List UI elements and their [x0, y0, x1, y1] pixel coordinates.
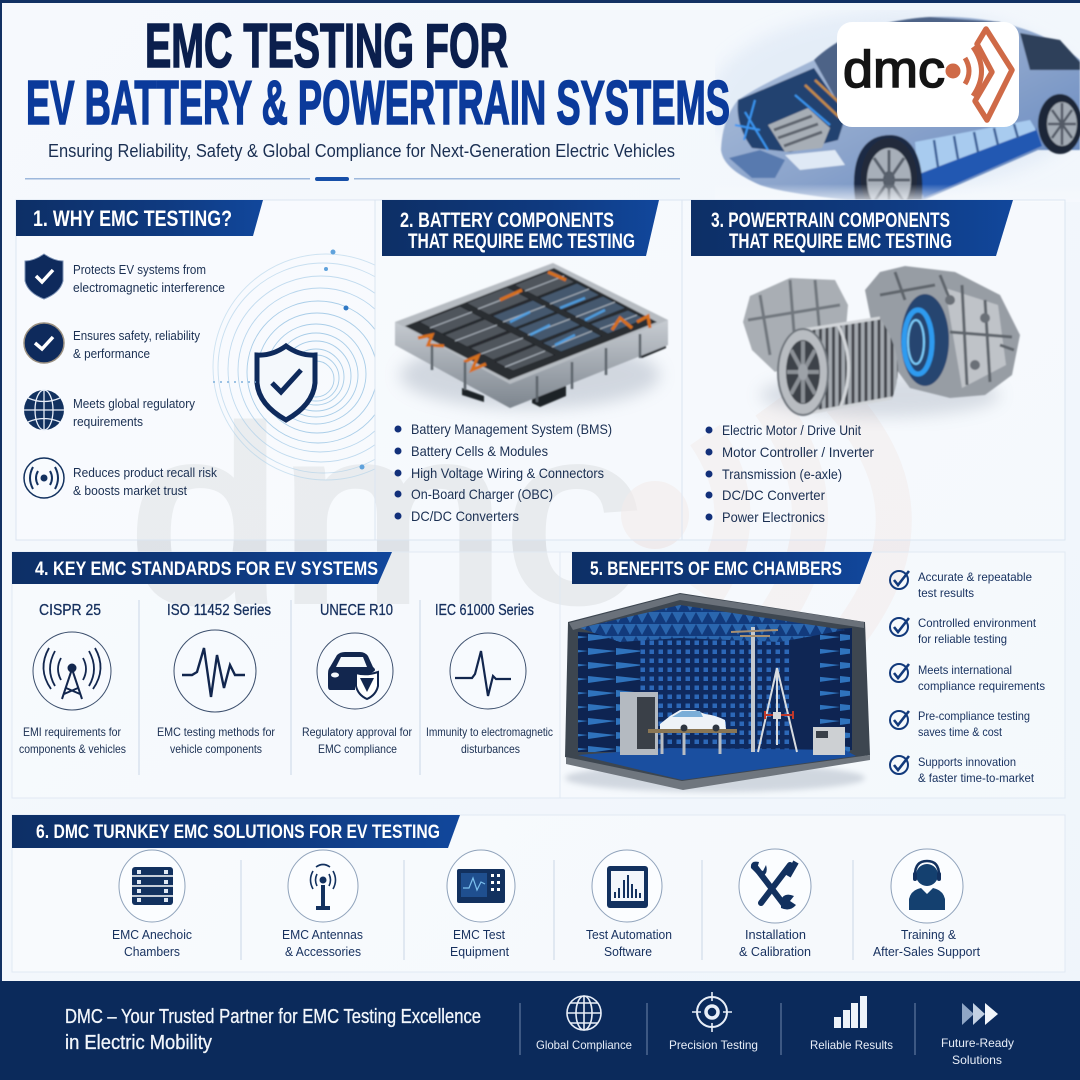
- panel: battery components: [375, 200, 682, 540]
- subtitle: Ensuring Reliability, Safety & Global Compliance for Next-Generation Electric Vehicles: [48, 141, 675, 161]
- left stator: [743, 278, 848, 372]
- item: recall: & boosts market trust: [73, 483, 187, 498]
- benefit checklist: Meets international: [918, 663, 1012, 677]
- solution: antennas: EMC Antennas: [282, 927, 363, 942]
- powertrain list: Electric Motor / Drive Unit: [722, 422, 861, 438]
- icon: precision testing: Precision Testing: [669, 1038, 758, 1052]
- solution: training: Training &: [901, 927, 956, 942]
- benefit checklist: [890, 570, 1045, 785]
- solution: chambers: EMC Anechoic: [112, 927, 192, 942]
- section header 2: [382, 200, 659, 256]
- powertrain list: [706, 422, 874, 525]
- battery list: Battery Cells & Modules: [411, 443, 548, 459]
- watermark: dmc logo: [130, 378, 894, 652]
- standard: ISO 11452: vehicle components: [170, 742, 262, 756]
- section header 4: 4. KEY EMC STANDARDS FOR EV SYSTEMS: [35, 559, 378, 580]
- solution: antennas: & Accessories: [285, 944, 361, 959]
- solution: equipment: [447, 850, 515, 959]
- solution: installation: & Calibration: [739, 944, 811, 959]
- item: safety: [24, 323, 200, 363]
- item: protects: [25, 254, 225, 299]
- car: [660, 710, 726, 729]
- standard: IEC 61000: IEC 61000 Series: [435, 602, 534, 619]
- standard: UNECE R10: Regulatory approval for: [302, 725, 412, 739]
- panel: standards: [12, 552, 560, 798]
- icon: future-ready: Future-Ready: [941, 1036, 1014, 1050]
- battery list: [394, 421, 612, 524]
- solution: chambers: Chambers: [124, 944, 180, 959]
- item: protects: electromagnetic interference: [73, 280, 225, 295]
- section header 3: [691, 200, 1013, 256]
- powertrain list: Power Electronics: [722, 509, 825, 525]
- standard: ISO 11452: ISO 11452 Series: [167, 602, 271, 619]
- benefit checklist: for reliable testing: [918, 632, 1007, 646]
- panel: powertrain components: [682, 200, 1065, 540]
- benefit checklist: Pre-compliance testing: [918, 709, 1030, 723]
- solution: software: Software: [604, 944, 652, 959]
- powertrain list: DC/DC Converter: [722, 487, 825, 503]
- right housing: [865, 266, 1020, 398]
- rack: [620, 692, 658, 755]
- panel: benefits of chambers: [560, 552, 1065, 798]
- solution: software: [586, 850, 672, 959]
- standard: IEC 61000: [426, 602, 553, 756]
- footer tagline: [65, 1006, 481, 1054]
- icon: future-ready: Solutions: [952, 1053, 1002, 1067]
- item: global: [24, 390, 195, 430]
- icon: global compliance: Global Compliance: [536, 1038, 632, 1052]
- icon: reliable results: Reliable Results: [810, 1038, 893, 1052]
- section header 3: THAT REQUIRE EMC TESTING: [729, 230, 952, 253]
- battery list: High Voltage Wiring & Connectors: [411, 465, 604, 481]
- title divider: [25, 177, 680, 181]
- benefit checklist: test results: [918, 586, 974, 600]
- battery pack illustration: [395, 263, 668, 409]
- standard: ISO 11452: EMC testing methods for: [157, 725, 275, 739]
- solution: installation: Installation: [745, 927, 806, 942]
- icon: reliable results: [810, 996, 893, 1052]
- standard: CISPR 25: components & vehicles: [19, 742, 126, 756]
- side equipment: [813, 727, 845, 755]
- car illustration: [715, 12, 1080, 200]
- standard: UNECE R10: EMC compliance: [318, 742, 397, 756]
- standard: IEC 61000: disturbances: [461, 742, 520, 756]
- logo: dmc: dmc: [843, 41, 945, 99]
- panel: turnkey solutions: [12, 815, 1065, 972]
- footer tagline: in Electric Mobility: [65, 1032, 212, 1054]
- benefit checklist: saves time & cost: [918, 725, 1003, 739]
- icon: precision testing: [669, 992, 758, 1052]
- standard: CISPR 25: EMI requirements for: [23, 725, 121, 739]
- logo: dmc: [837, 22, 1019, 127]
- section header 3: 3. POWERTRAIN COMPONENTS: [711, 209, 950, 232]
- benefit checklist: compliance requirements: [918, 679, 1045, 693]
- battery list: Battery Management System (BMS): [411, 421, 612, 437]
- section header 6: [12, 815, 460, 848]
- solution: equipment: EMC Test: [453, 927, 505, 942]
- benefit checklist: Supports innovation: [918, 755, 1016, 769]
- battery list: DC/DC Converters: [411, 508, 519, 524]
- item: recall: Reduces product recall risk: [73, 465, 217, 480]
- item: global: Meets global regulatory: [73, 396, 195, 411]
- mast: [751, 627, 755, 752]
- powertrain list: Motor Controller / Inverter: [722, 444, 874, 460]
- watermark: dmc logo: dmc: [130, 378, 640, 652]
- section header 1: 1. WHY EMC TESTING?: [33, 206, 232, 231]
- benefit checklist: Controlled environment: [918, 616, 1037, 630]
- solution: chambers: [112, 850, 192, 959]
- item: safety: Ensures safety, reliability: [73, 328, 200, 343]
- icon: global compliance: [536, 996, 632, 1052]
- section header 1: [16, 200, 263, 236]
- benefit checklist: Accurate & repeatable: [918, 570, 1032, 584]
- solution: installation: [739, 849, 811, 959]
- section header 4: [12, 552, 392, 584]
- tripod antenna: [758, 668, 797, 752]
- battery list: On-Board Charger (OBC): [411, 486, 553, 502]
- solution: software: Test Automation: [586, 927, 672, 942]
- item: protects: Protects EV systems from: [73, 262, 206, 277]
- standard: IEC 61000: Immunity to electromagnetic: [426, 725, 553, 739]
- section header 2: THAT REQUIRE EMC TESTING: [408, 230, 635, 253]
- footer tagline: DMC – Your Trusted Partner for EMC Testing Excellence: [65, 1006, 481, 1028]
- solution: equipment: Equipment: [450, 944, 509, 959]
- solution: training: After-Sales Support: [873, 944, 980, 959]
- standard: UNECE R10: UNECE R10: [320, 602, 393, 619]
- title: EMC TESTING FOR: [145, 12, 508, 81]
- section header 6: 6. DMC TURNKEY EMC SOLUTIONS FOR EV TESTING: [36, 822, 440, 843]
- title: [26, 12, 730, 138]
- standard: ISO 11452: [157, 602, 275, 756]
- item: recall: [24, 458, 217, 498]
- powertrain list: Transmission (e-axle): [722, 466, 842, 482]
- solution: training: [873, 849, 980, 959]
- icon: future-ready: [941, 1003, 1014, 1067]
- panel: why EMC testing: [16, 200, 374, 540]
- motor illustration: [743, 266, 1020, 417]
- section header 2: 2. BATTERY COMPONENTS: [400, 209, 614, 232]
- section header 5: [572, 552, 872, 584]
- standard: UNECE R10: [302, 602, 412, 756]
- anechoic chamber illustration: [565, 593, 870, 792]
- standard: CISPR 25: CISPR 25: [39, 602, 101, 619]
- table: [648, 729, 737, 733]
- item: global: requirements: [73, 414, 143, 429]
- standard: CISPR 25: [19, 602, 126, 756]
- footer band: [0, 981, 1080, 1080]
- solution: antennas: [282, 850, 363, 959]
- benefit checklist: & faster time-to-market: [918, 771, 1035, 785]
- item: safety: & performance: [73, 346, 150, 361]
- radar shield graphic: [212, 250, 374, 480]
- finned rotor: [803, 318, 898, 414]
- section header 5: 5. BENEFITS OF EMC CHAMBERS: [590, 559, 842, 580]
